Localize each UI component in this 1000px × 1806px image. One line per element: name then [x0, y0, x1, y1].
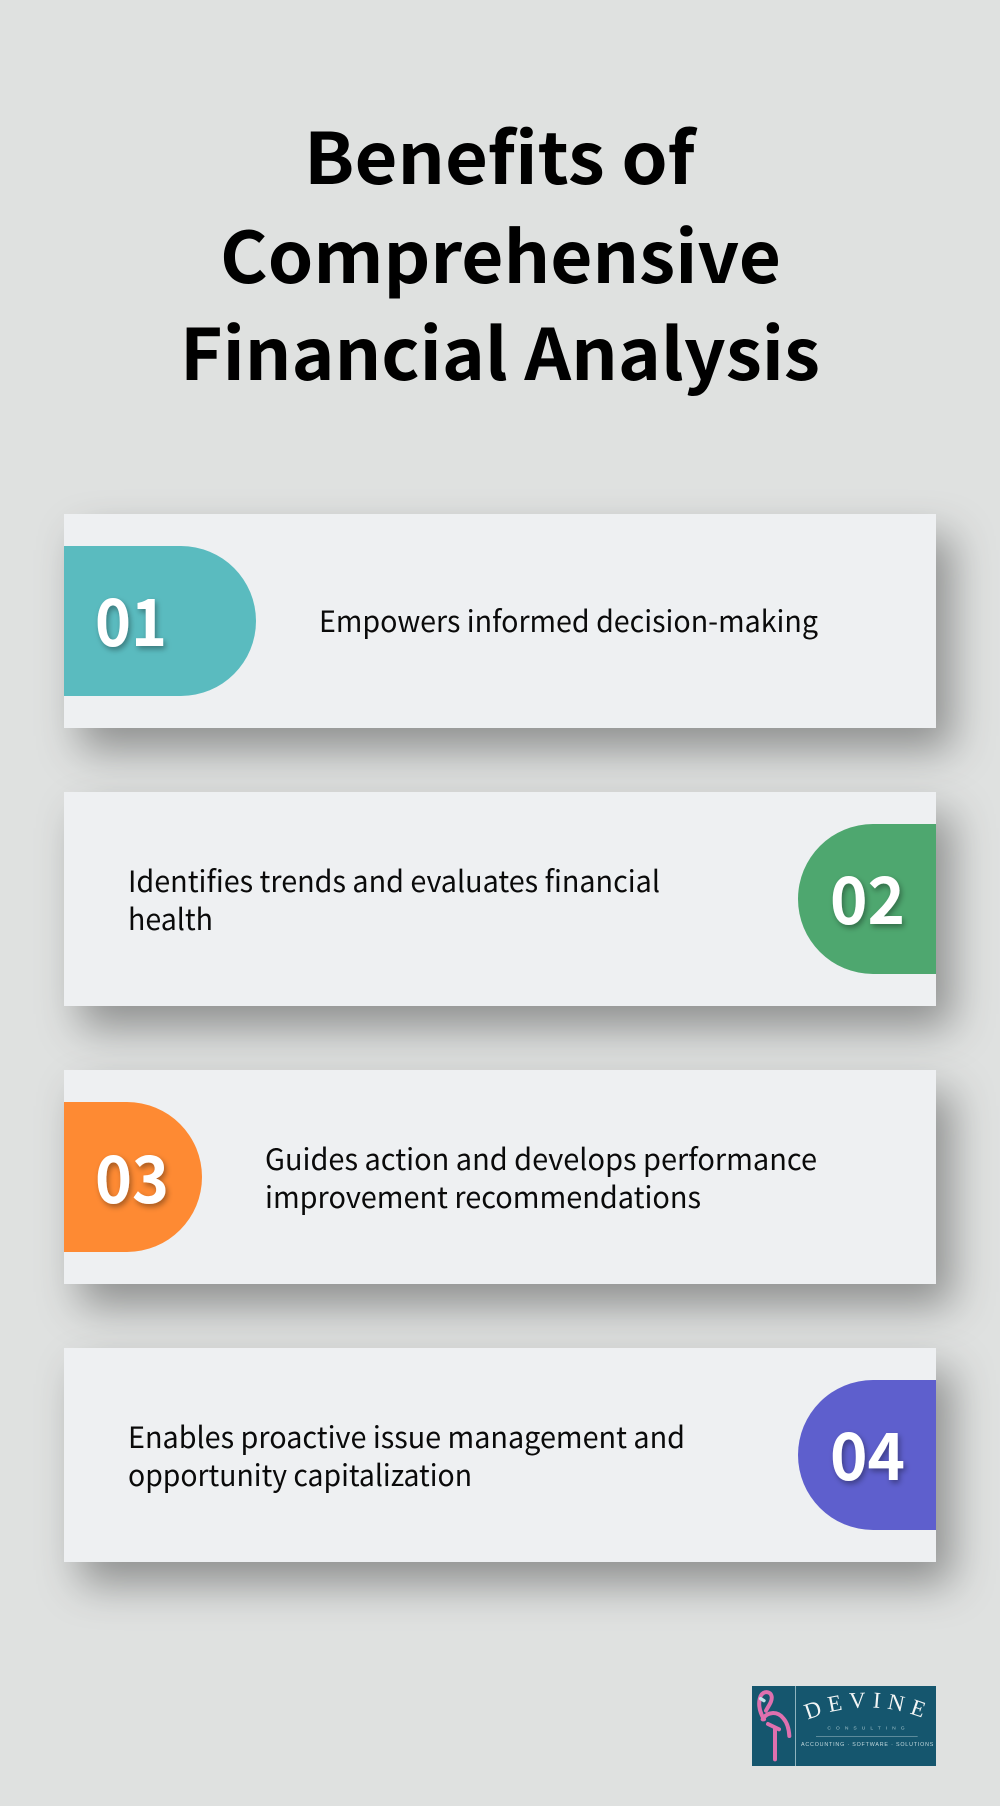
text: benefit 04 [128, 1415, 685, 1495]
text: benefit 03 [265, 1137, 817, 1217]
text: benefit 02: Identifies trends and evaluates financial [128, 859, 660, 901]
number 02: 02 [830, 849, 905, 943]
number 03: 03 [95, 1128, 169, 1222]
text: benefit 04: Enables proactive issue management and [128, 1415, 685, 1457]
panel: benefit 02 [64, 792, 936, 1006]
panel: benefit 01 [64, 514, 936, 728]
text: benefit 02 [128, 859, 660, 939]
badge: 01 teal [64, 546, 256, 696]
text: benefit 03: improvement recommendations [265, 1175, 701, 1217]
badge: 03 orange [64, 1102, 202, 1252]
number 04: 04 [830, 1405, 905, 1499]
text: benefit 04: opportunity capitalization [128, 1453, 472, 1495]
title [180, 103, 820, 401]
title: Benefits of [304, 103, 698, 205]
services line: ACCOUNTING · SOFTWARE · SOLUTIONS [801, 1742, 934, 1748]
tagline: CONSULTING [827, 1725, 905, 1731]
title: Financial Analysis [180, 299, 820, 401]
text: benefit 03: Guides action and develops performance [265, 1137, 817, 1179]
badge: 04 purple [798, 1380, 936, 1530]
logo: Devine Consulting [752, 1686, 936, 1766]
icon: flamingo [759, 1692, 789, 1759]
title: Comprehensive [220, 202, 781, 304]
badge: 02 green [798, 824, 936, 974]
wordmark: DEVINE [803, 1692, 926, 1720]
text: benefit 01: Empowers informed decision-making [319, 599, 818, 641]
text: benefit 02: health [128, 897, 213, 939]
panel: benefit 04 [64, 1348, 936, 1562]
number 01: 01 [95, 571, 167, 665]
panel: benefit 03 [64, 1070, 936, 1284]
